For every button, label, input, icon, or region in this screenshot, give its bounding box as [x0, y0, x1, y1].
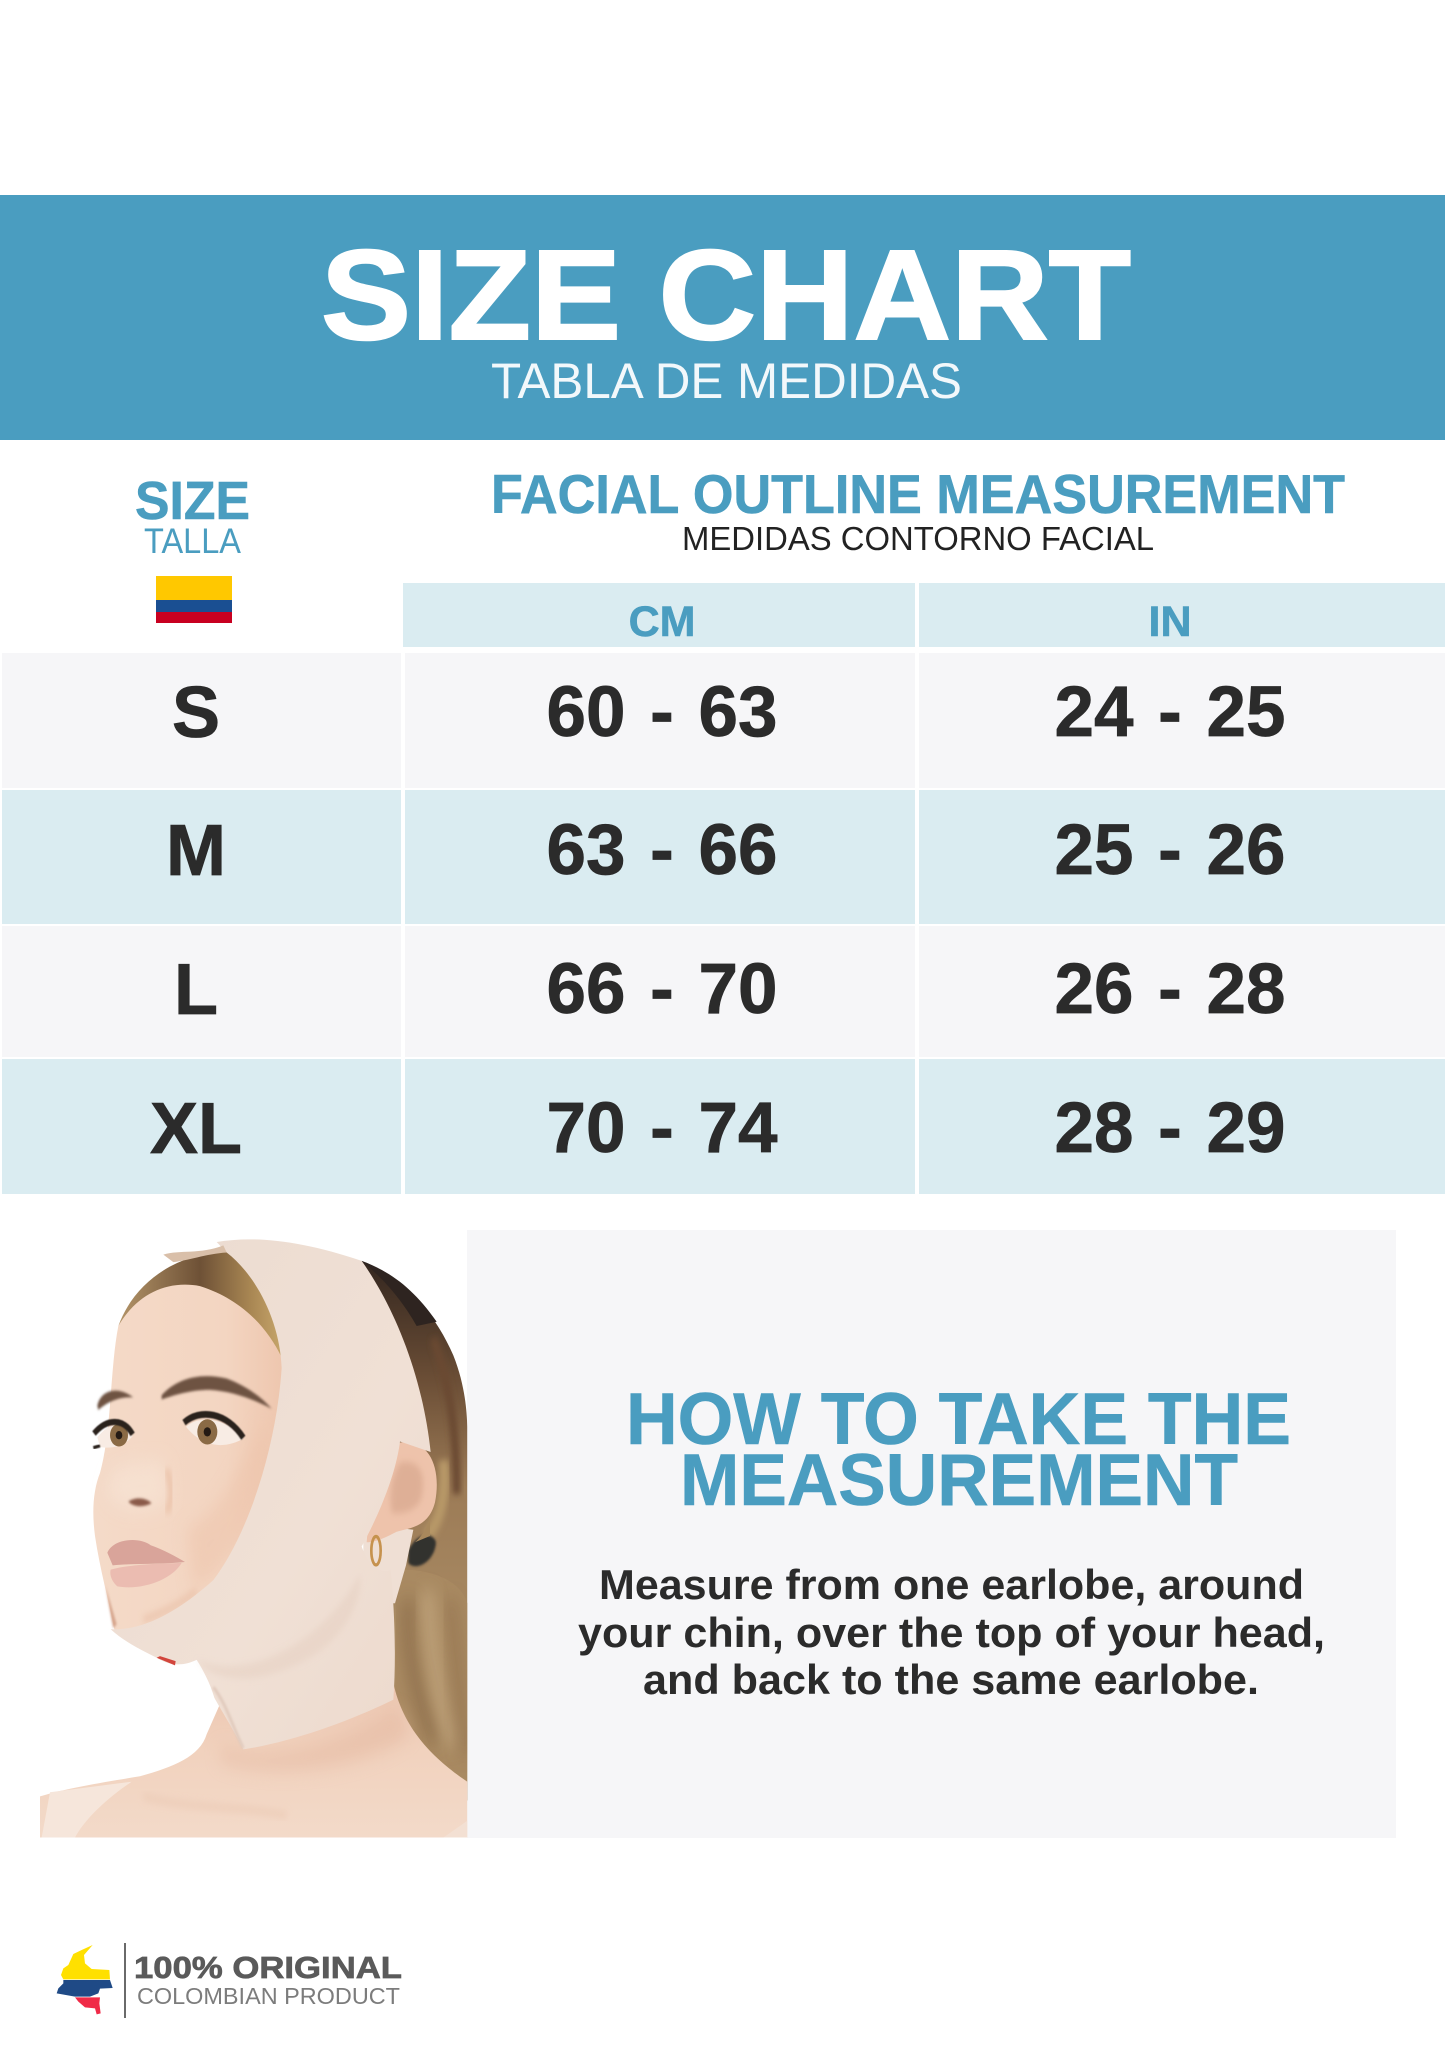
table row: L: [2, 926, 1445, 1057]
panel heading: [626, 1379, 1291, 1521]
measurement heading: [491, 463, 1345, 557]
table row: S: 60 - 63: [546, 673, 778, 752]
table row: L: L: [174, 950, 218, 1030]
photo: woman wearing facial compression mask: [40, 1239, 467, 1838]
panel heading: MEASUREMENT: [680, 1440, 1238, 1521]
table row: S: [2, 653, 1445, 788]
tank top straps: [42, 1782, 467, 1838]
table row: S: 24 - 25: [1054, 673, 1286, 752]
panel instructions: your chin, over the top of your head,: [578, 1609, 1325, 1656]
table row: XL: 70 - 74: [546, 1089, 778, 1168]
panel instructions: and back to the same earlobe.: [643, 1656, 1259, 1703]
mask: [111, 1239, 431, 1749]
table header: IN: [919, 583, 1445, 647]
logo text: 100% ORIGINAL: [134, 1950, 402, 1985]
table header: CM: CM: [629, 598, 695, 646]
hair and ponytail: [362, 1261, 467, 1801]
table row: XL: XL: [150, 1089, 242, 1169]
panel instructions: Measure from one earlobe, around: [599, 1561, 1304, 1608]
table row: M: [2, 790, 1445, 924]
table row: M: M: [166, 811, 226, 891]
size column heading: SIZE: [135, 471, 250, 531]
table row: L: 66 - 70: [546, 950, 778, 1029]
footer logo: 100% original Colombian product: [57, 1943, 402, 2018]
panel: how to take the measurement: [467, 1230, 1396, 1838]
nose: [117, 1469, 172, 1514]
earring: [371, 1536, 381, 1565]
table header: IN: IN: [1148, 598, 1192, 646]
ear: [367, 1442, 437, 1542]
title: SIZE CHART: [321, 224, 1131, 367]
table row: M: 63 - 66: [546, 811, 778, 890]
eyebrows: [97, 1376, 272, 1410]
footer logo: 100% original Colombian product: COLOMBIAN PRODUCT: [137, 1983, 400, 2009]
table row: S: S: [172, 673, 220, 753]
panel instructions: [578, 1561, 1325, 1703]
eyes: [93, 1414, 243, 1448]
table header: CM: [403, 583, 915, 647]
table row: XL: [2, 1059, 1445, 1194]
face: [93, 1278, 283, 1633]
neck and shoulders: [40, 1683, 467, 1838]
panel heading: HOW TO TAKE THE: [626, 1379, 1291, 1460]
lips: [107, 1540, 185, 1587]
subtitle: TABLA DE MEDIDAS: [491, 353, 962, 409]
lower mask behind ear: [363, 1523, 413, 1603]
table row: XL: 28 - 29: [1054, 1089, 1286, 1168]
front hairline: [118, 1252, 282, 1358]
icon: Colombia map in flag colours: [57, 1945, 113, 2014]
table row: L: 26 - 28: [1054, 950, 1286, 1029]
measurement heading: MEDIDAS CONTORNO FACIAL: [682, 520, 1154, 557]
icon: Colombian flag: [156, 576, 232, 623]
size column heading: TALLA: [144, 522, 242, 561]
header banner: [0, 195, 1445, 440]
table row: M: 25 - 26: [1054, 811, 1286, 890]
measurement heading: FACIAL OUTLINE MEASUREMENT: [491, 463, 1345, 525]
size column heading: [135, 471, 250, 561]
